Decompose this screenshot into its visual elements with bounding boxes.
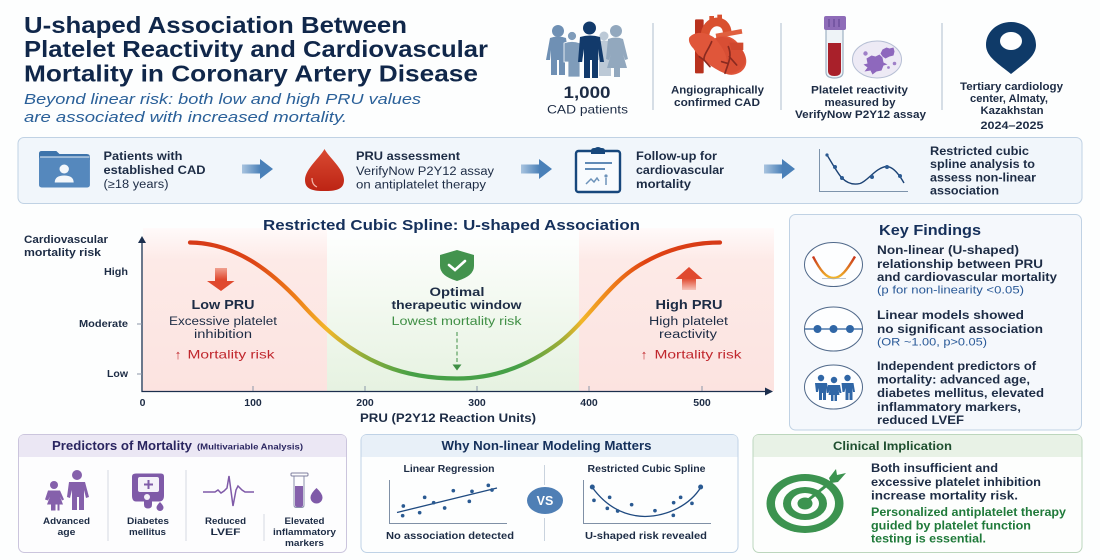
panel: clinical implication bbox=[753, 434, 1082, 552]
panel header bbox=[754, 435, 1082, 457]
stat: study location: 2024–2025 bbox=[980, 120, 1044, 132]
stat: study location: center, Almaty, bbox=[970, 93, 1048, 105]
text: optimal window bbox=[392, 285, 522, 328]
label: LVEF: Reduced bbox=[205, 516, 246, 527]
stat: platelet reactivity assay bbox=[795, 16, 927, 121]
y axis labels: Moderate bbox=[79, 318, 128, 330]
text: PRU assessment: PRU assessment bbox=[356, 151, 460, 163]
icon: tube and drop bbox=[291, 473, 322, 508]
finding 3: mortality: advanced age, bbox=[877, 374, 1030, 386]
arrow 2 bbox=[521, 159, 552, 179]
panel: predictors of mortality bbox=[18, 434, 346, 552]
title: Mortality in Coronary Artery Disease bbox=[24, 60, 478, 86]
stat: angiographically confirmed CAD: Angiographically bbox=[671, 84, 765, 96]
text: high PRU: Mortality risk bbox=[654, 348, 743, 362]
chart: linear regression bbox=[386, 464, 514, 542]
chart: restricted cubic spline mini: U-shaped risk revealed bbox=[585, 530, 707, 542]
text: follow-up: mortality bbox=[636, 179, 692, 191]
zone: optimal window bbox=[327, 238, 579, 391]
text: low PRU: Excessive platelet bbox=[169, 316, 278, 328]
finding 2: no significant association bbox=[877, 324, 1043, 336]
icon: heart bbox=[689, 15, 746, 75]
x axis labels: 300 bbox=[468, 397, 486, 409]
text: PRU assessment bbox=[356, 151, 494, 192]
icon: down arrow bbox=[207, 268, 234, 291]
icon: group of patients bbox=[546, 22, 628, 78]
finding 2: Linear models showed bbox=[877, 310, 1024, 322]
icon: mini spline chart bbox=[820, 149, 908, 192]
finding 3 bbox=[877, 361, 1044, 427]
finding 3: inflammatory markers, bbox=[877, 402, 1021, 414]
text: optimal window: therapeutic window bbox=[392, 298, 522, 312]
icon: U curve bbox=[804, 242, 862, 286]
stat: angiographically confirmed CAD: confirmed CAD bbox=[674, 97, 760, 109]
icon: blood drop bbox=[305, 149, 344, 191]
heading: clinical implication: Clinical Implication bbox=[833, 439, 952, 453]
subtitle: are associated with increased mortality. bbox=[24, 109, 347, 126]
text: low PRU bbox=[169, 298, 278, 362]
chart: restricted cubic spline mini bbox=[584, 464, 711, 542]
finding 1: (p for non-linearity <0.05) bbox=[877, 284, 1024, 296]
text: high PRU: High PRU bbox=[656, 298, 722, 312]
x axis labels bbox=[140, 397, 711, 425]
text: spline analysis: Restricted cubic bbox=[930, 146, 1030, 158]
heading: why non-linear: Why Non-linear Modeling Matters bbox=[442, 439, 652, 453]
text: patients: established CAD bbox=[104, 165, 206, 177]
text: low PRU: ↑ bbox=[175, 347, 181, 362]
title: U-shaped Association Between bbox=[24, 12, 407, 38]
text: follow-up bbox=[636, 151, 725, 191]
stat: 1,000 CAD patients bbox=[546, 22, 628, 116]
chart: restricted cubic spline bbox=[24, 217, 774, 425]
icon: patient folder bbox=[39, 151, 90, 188]
finding 3: diabetes mellitus, elevated bbox=[877, 388, 1044, 400]
label: inflammatory markers bbox=[273, 516, 337, 549]
icon: target with arrow bbox=[766, 469, 846, 533]
text: low PRU: Low PRU bbox=[192, 298, 254, 312]
title: Platelet Reactivity and Cardiovascular bbox=[24, 36, 488, 62]
text: implication bbox=[871, 463, 1041, 502]
zone: low PRU bbox=[143, 228, 327, 391]
text: recommendation: guided by platelet function bbox=[871, 520, 1031, 532]
zone: high PRU bbox=[579, 228, 774, 391]
text: recommendation: Personalized antiplatelet therapy bbox=[871, 507, 1067, 519]
finding 3: reduced LVEF bbox=[877, 415, 964, 427]
label: diabetes: mellitus bbox=[129, 527, 166, 538]
text: spline analysis bbox=[930, 146, 1037, 198]
stat: study location: Tertiary cardiology bbox=[960, 81, 1064, 93]
arrow: to nadir bbox=[452, 332, 462, 370]
label: advanced age bbox=[43, 516, 90, 538]
heading: key findings: Key Findings bbox=[879, 222, 981, 239]
label: diabetes: Diabetes bbox=[127, 516, 169, 527]
text: patients: Patients with bbox=[104, 151, 182, 163]
text: high PRU: ↑ bbox=[641, 347, 647, 362]
x axis labels: 0 bbox=[140, 397, 146, 409]
label: diabetes bbox=[127, 516, 169, 538]
VS badge: VS bbox=[537, 494, 553, 508]
text: spline analysis: assess non-linear bbox=[930, 172, 1037, 184]
icon: older adults bbox=[45, 470, 89, 510]
stat: study location bbox=[960, 22, 1064, 132]
heading: predictors bbox=[52, 439, 303, 453]
x axis labels: 500 bbox=[693, 397, 711, 409]
panel header bbox=[19, 435, 346, 457]
finding 1: Non-linear (U-shaped) bbox=[877, 245, 1019, 257]
finding 1: and cardiovascular mortality bbox=[877, 272, 1058, 284]
chart: restricted cubic spline mini: Restricted Cubic Spline bbox=[588, 464, 706, 475]
panel: study flow bbox=[18, 138, 1082, 204]
text: implication: increase mortality risk. bbox=[871, 490, 1018, 502]
label: inflammatory markers: Elevated bbox=[284, 516, 325, 527]
text: high PRU: High platelet bbox=[649, 316, 729, 328]
stat: 1,000 CAD patients: CAD patients bbox=[547, 102, 628, 116]
stat: 1,000 CAD patients: 1,000 bbox=[564, 83, 610, 102]
y axis labels bbox=[24, 234, 129, 380]
subtitle: Beyond linear risk: both low and high PRU values bbox=[24, 91, 422, 108]
x axis labels: 400 bbox=[580, 397, 598, 409]
x axis labels: PRU (P2Y12 Reaction Units) bbox=[360, 413, 536, 425]
text: low PRU: Mortality risk bbox=[188, 348, 276, 362]
panel: why non-linear modeling matters bbox=[361, 434, 738, 552]
y axis labels: Low bbox=[107, 368, 129, 380]
icon: up arrow bbox=[676, 267, 702, 290]
VS badge bbox=[527, 487, 563, 514]
text: PRU assessment: VerifyNow P2Y12 assay bbox=[356, 166, 494, 178]
icon: flat line bbox=[804, 307, 862, 351]
text: PRU assessment: on antiplatelet therapy bbox=[356, 180, 486, 192]
x axis labels: 200 bbox=[356, 397, 374, 409]
finding 2: (OR ~1.00, p>0.05) bbox=[877, 336, 987, 348]
heading: predictors: (Multivariable Analysis) bbox=[197, 442, 303, 452]
text: spline analysis: association bbox=[930, 186, 999, 198]
chart: linear regression: No association detected bbox=[386, 530, 514, 542]
y axis labels: Cardiovascular bbox=[24, 234, 109, 246]
text: optimal window: Lowest mortality risk bbox=[392, 316, 522, 328]
icon: glucose meter bbox=[132, 474, 164, 511]
stat: angiographically confirmed CAD bbox=[671, 15, 765, 109]
stat: study location: Kazakhstan bbox=[980, 105, 1044, 117]
title bbox=[24, 12, 488, 86]
label: LVEF: LVEF bbox=[210, 527, 241, 538]
panel header bbox=[362, 435, 738, 457]
y axis labels: mortality risk bbox=[24, 247, 102, 259]
text: patients: (≥18 years) bbox=[104, 179, 169, 191]
icon: ECG waveform bbox=[203, 476, 254, 506]
label: advanced age: Advanced bbox=[43, 516, 90, 527]
text: high PRU bbox=[641, 298, 743, 362]
finding 1 bbox=[877, 245, 1058, 296]
text: recommendation bbox=[871, 507, 1067, 546]
text: follow-up: cardiovascular bbox=[636, 165, 725, 177]
text: low PRU: inhibition bbox=[194, 329, 252, 341]
icon: blood tube bbox=[824, 16, 846, 78]
text: high PRU: reactivity bbox=[659, 329, 717, 341]
text: spline analysis: spline analysis to bbox=[930, 159, 1035, 171]
finding 1: relationship between PRU bbox=[877, 259, 1043, 271]
x axis labels: 100 bbox=[244, 397, 262, 409]
label: inflammatory markers: markers bbox=[285, 538, 324, 549]
stat: platelet reactivity assay: Platelet reactivity bbox=[811, 84, 909, 96]
text: implication: Both insufficient and bbox=[871, 463, 998, 475]
chart title: Restricted Cubic Spline: U-shaped Association bbox=[263, 217, 640, 234]
chart: linear regression: Linear Regression bbox=[404, 464, 494, 475]
subtitle bbox=[24, 91, 422, 126]
text: follow-up: Follow-up for bbox=[636, 151, 718, 163]
icon: map pin bbox=[986, 22, 1036, 74]
icon: three people bbox=[804, 365, 862, 409]
icon: shield check bbox=[440, 250, 474, 281]
label: advanced age: age bbox=[58, 527, 76, 538]
text: optimal window: Optimal bbox=[430, 285, 484, 299]
finding 3: Independent predictors of bbox=[877, 361, 1036, 373]
label: LVEF bbox=[205, 516, 246, 538]
text: implication: excessive platelet inhibition bbox=[871, 477, 1041, 489]
label: inflammatory markers: inflammatory bbox=[273, 527, 337, 538]
stat: platelet reactivity assay: measured by bbox=[824, 97, 896, 109]
heading: predictors: Predictors of Mortality bbox=[52, 439, 192, 453]
text: recommendation: testing is essential. bbox=[871, 534, 986, 546]
axes bbox=[137, 236, 773, 396]
text: patients bbox=[104, 151, 206, 191]
icon: platelet dish bbox=[852, 41, 902, 78]
panel: key findings bbox=[790, 214, 1082, 430]
y axis labels: High bbox=[104, 266, 128, 278]
icon: clipboard bbox=[576, 147, 620, 192]
finding 2 bbox=[877, 310, 1043, 348]
arrow 1 bbox=[242, 159, 273, 179]
U-shaped curve bbox=[190, 242, 720, 378]
arrow 3 bbox=[764, 159, 795, 179]
stat: platelet reactivity assay: VerifyNow P2Y12 assay bbox=[795, 109, 927, 121]
